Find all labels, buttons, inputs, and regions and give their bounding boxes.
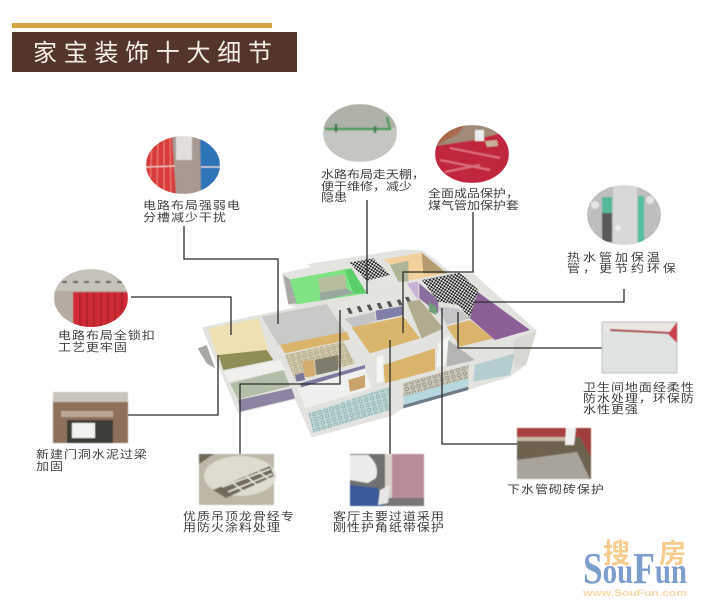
- caption: 优质吊顶龙骨经专: [183, 509, 295, 523]
- caption: 分槽减少干扰: [143, 211, 227, 224]
- central wood floor: [352, 317, 420, 353]
- SouFun logo: www.SouFun.com: [582, 588, 687, 598]
- photo: insulated hot water pipes: [587, 185, 661, 245]
- callout: 卫生间: [583, 322, 695, 416]
- callout: 护角: [333, 454, 445, 534]
- living room wood floor: [280, 332, 350, 353]
- leader line: 成品保护: [403, 212, 473, 333]
- front pattern panel: [403, 365, 468, 408]
- caption: 加固: [36, 460, 64, 473]
- photo: red floor protection: [435, 125, 509, 183]
- photo: worker and corner tape: [350, 454, 424, 506]
- caption: 便于维修，减少: [321, 179, 412, 193]
- leader line: 过梁: [128, 355, 218, 415]
- large checker ceiling: [422, 273, 478, 318]
- caption: 水性更强: [583, 403, 639, 416]
- cream room: [208, 318, 273, 370]
- caption: 下水管砌砖保护: [507, 482, 605, 496]
- SouFun logo: 搜: [603, 539, 630, 569]
- callout: 全锁扣: [54, 269, 156, 354]
- title banner: 家宝装饰十大细节: [33, 40, 279, 67]
- photo: green water pipes: [323, 104, 397, 162]
- front glass: [308, 387, 390, 433]
- caption: 水路布局走天棚，: [321, 167, 425, 181]
- caption: 防水处理，环保防: [583, 391, 695, 405]
- title banner: [12, 23, 297, 72]
- purple room: [407, 282, 530, 340]
- upper peach room: [383, 253, 447, 282]
- leader line: 水路: [366, 200, 368, 294]
- caption: 煤气管加保护套: [428, 198, 519, 212]
- callout: 水路: [321, 104, 425, 204]
- lower wood floor: [383, 348, 435, 383]
- caption: 卫生间地面经柔性: [583, 381, 695, 394]
- callout: 成品保护: [428, 125, 519, 212]
- right terrace glass: [473, 353, 515, 382]
- callout: 吊顶: [183, 454, 295, 534]
- caption: 隐患: [321, 191, 347, 204]
- caption: 电路布局强弱电: [143, 198, 241, 212]
- leader line: 热水管: [475, 289, 624, 302]
- leader line: 吊顶: [240, 310, 340, 454]
- caption: 用防火涂料处理: [183, 520, 281, 534]
- patterned wall: [285, 342, 365, 388]
- small checker ceiling: [349, 258, 390, 281]
- right wood floor: [447, 320, 493, 347]
- caption: 全面成品保护，: [428, 186, 519, 200]
- caption: 客厅主要过道采用: [333, 509, 445, 523]
- photo: drain pipe brick protection: [517, 428, 591, 479]
- caption: 热水管加保温: [567, 250, 663, 264]
- caption: 电路布局全锁扣: [58, 328, 156, 342]
- house 3D floor plan: [198, 249, 537, 437]
- SouFun logo: 房: [659, 539, 686, 569]
- leader line: 下水管: [442, 308, 517, 444]
- leader line: 强弱电: [184, 226, 278, 324]
- callout: 强弱电: [143, 136, 241, 224]
- front white wall: [298, 368, 372, 408]
- photo: door opening with lintel: [53, 392, 128, 443]
- photo: red conduits with clips: [54, 269, 128, 328]
- beam slats: [328, 293, 413, 327]
- callout: 过梁: [36, 392, 148, 473]
- main slab: [202, 273, 537, 437]
- leader line: 护角: [389, 340, 391, 454]
- photo: red and blue conduits: [146, 136, 220, 194]
- caption: 新建门洞水泥过梁: [36, 447, 148, 461]
- caption: 刚性护角纸带保护: [333, 521, 445, 534]
- grey ceiling: [262, 304, 348, 345]
- callout: 下水管: [507, 428, 605, 496]
- SouFun logo: SouFun: [583, 544, 687, 593]
- left terrace: [230, 370, 295, 412]
- callout: 热水管: [567, 185, 679, 275]
- caption: 管，更节约环保: [567, 261, 679, 275]
- leader line: 卫生间: [458, 312, 603, 348]
- photo: ceiling framing: [199, 454, 276, 505]
- leader line: 全锁扣: [131, 297, 231, 335]
- photo: waterproofed floor: [602, 322, 677, 373]
- caption: 工艺更牢固: [58, 340, 128, 354]
- green room: [290, 268, 367, 304]
